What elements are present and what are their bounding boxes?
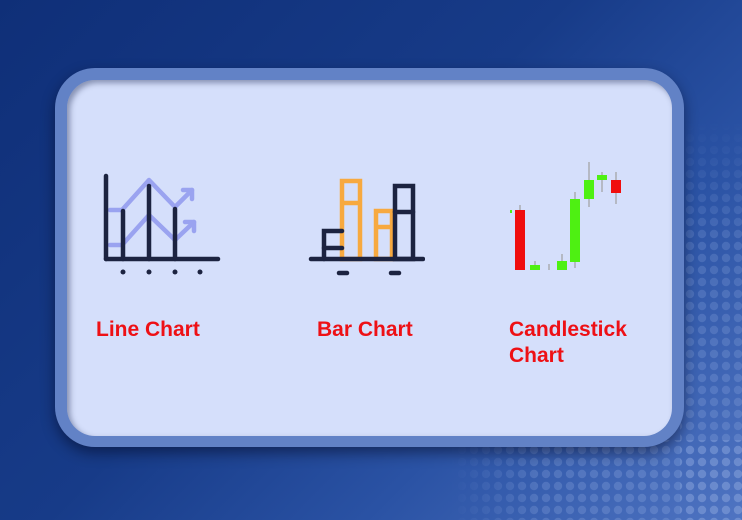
label: line chart: Line Chart	[96, 318, 200, 341]
label: candlestick chart	[509, 318, 627, 367]
icon: bar chart	[308, 178, 425, 276]
icon: line chart	[104, 174, 220, 274]
icon: candlestick chart	[510, 162, 621, 270]
panel: card	[55, 68, 684, 447]
label: candlestick chart: Chart	[509, 344, 564, 367]
background dot pattern	[482, 163, 742, 520]
label: candlestick chart: Candlestick	[509, 318, 627, 341]
label: bar chart: Bar Chart	[317, 318, 413, 341]
